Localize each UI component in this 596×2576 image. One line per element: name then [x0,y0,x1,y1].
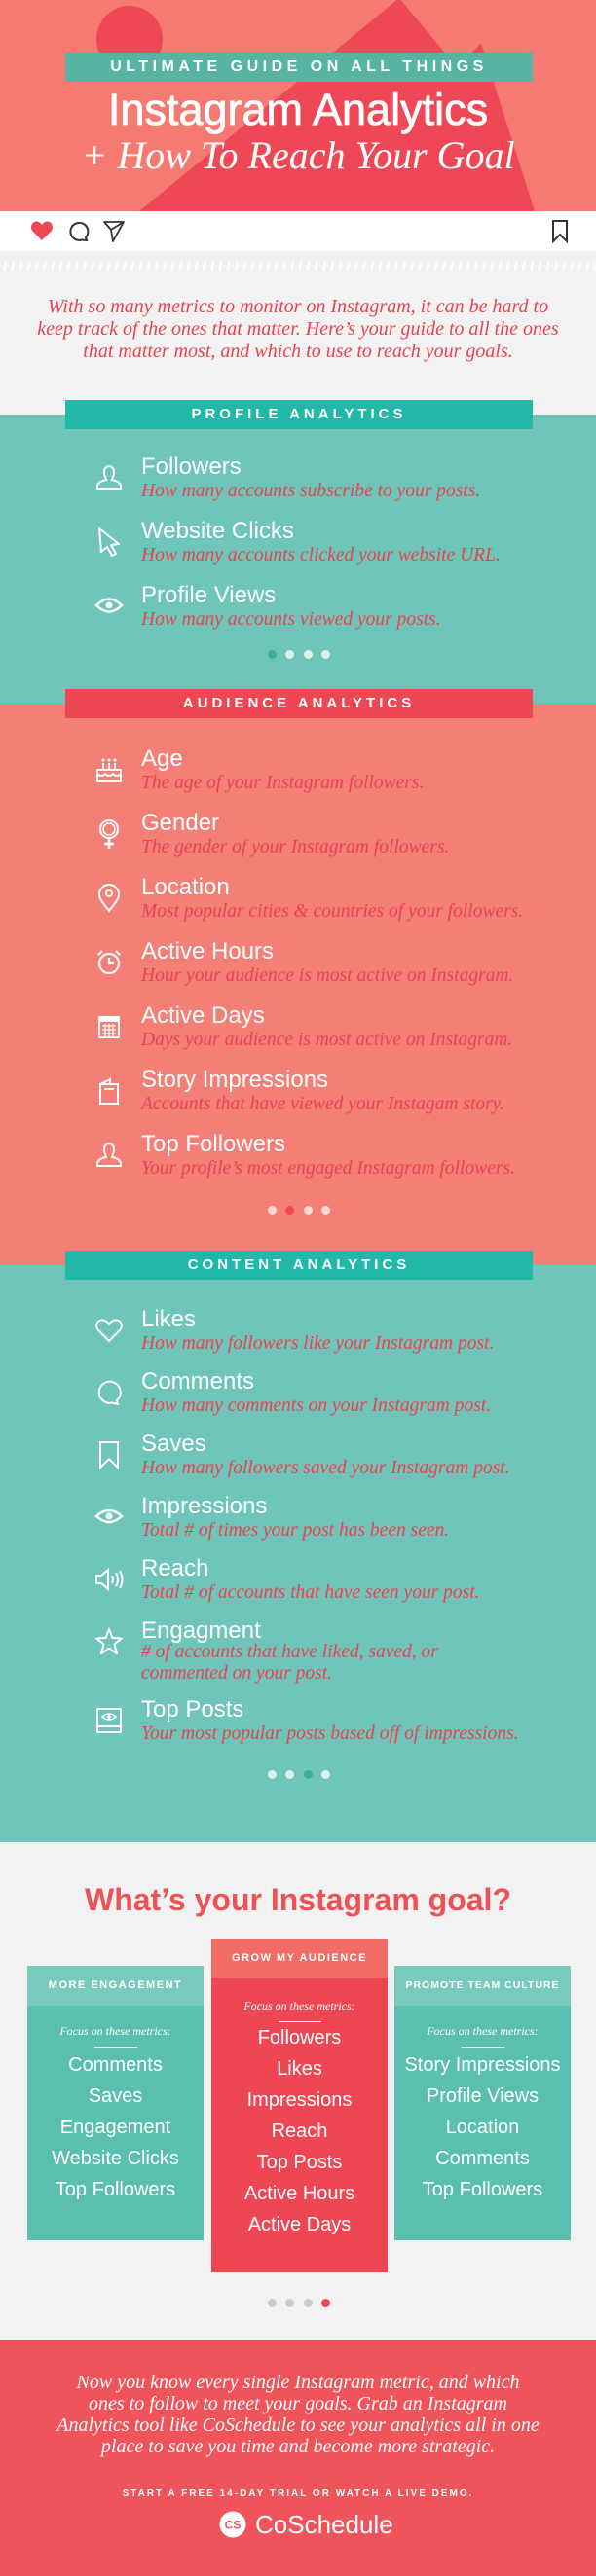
dots: audience [268,1206,330,1215]
item: active hours: Active Hours [141,938,274,964]
card: promote team culture: Focus on these metrics: [427,2024,539,2038]
card: promote team culture: Profile Views [427,2086,539,2107]
item: top followers: Your profile’s most engaged Instagram followers. [141,1158,515,1179]
item: reach: Total # of accounts that have seen your post. [141,1582,480,1603]
heading: content analytics [65,1251,533,1280]
goal heading: What’s your Instagram goal? [85,1882,511,1917]
item: engagement: # of accounts that have liked, saved, or [141,1642,438,1662]
item: gender: Gender [141,810,219,836]
item: engagement [95,1617,438,1684]
item: profile views [94,582,441,630]
item: reach [95,1555,480,1603]
card: promote team culture: Comments [435,2148,530,2169]
card: promote team culture: Location [446,2117,519,2138]
card: more engagement: MORE ENGAGEMENT [49,1979,182,1991]
item: impressions: Total # of times your post has been seen. [141,1520,449,1541]
item: top followers [96,1131,515,1179]
card: more engagement [27,1966,204,2240]
icon: heart [31,222,53,240]
card: grow my audience: Likes [277,2058,322,2080]
icon: comment [69,222,90,241]
card: more engagement: Website Clicks [52,2148,179,2169]
heading: audience analytics [65,689,533,718]
dots: goal [268,2299,330,2307]
title: Instagram Analytics [108,85,488,134]
item: top posts: Your most popular posts based off of impressions. [141,1723,519,1744]
footer text: Analytics tool like CoSchedule to see your analytics all in one [56,2414,540,2436]
item: age [96,745,424,793]
card: grow my audience: Active Hours [244,2183,354,2204]
item: website clicks [98,518,501,565]
item: likes [95,1306,494,1354]
card: promote team culture: Story Impressions [404,2054,561,2076]
card: grow my audience: Reach [272,2121,327,2142]
panel: audience analytics [0,704,596,1265]
item: impressions: Impressions [141,1493,267,1519]
icon: send [103,221,125,242]
item: active days: Days your audience is most active on Instagram. [141,1030,512,1050]
item: story impressions: Story Impressions [141,1067,328,1093]
card: grow my audience: Impressions [247,2089,352,2111]
item: story impressions: Accounts that have viewed your Instagam story. [141,1094,504,1114]
item: active days: Active Days [141,1002,265,1029]
item: followers: How many accounts subscribe to your posts. [141,481,480,501]
item: followers: Followers [141,454,242,480]
heading: audience analytics: AUDIENCE ANALYTICS [183,695,415,711]
item: active hours: Hour your audience is most active on Instagram. [141,965,513,986]
footer text: ones to follow to meet your goals. Grab an Instagram [89,2393,507,2414]
item: website clicks: How many accounts clicked your website URL. [141,545,501,565]
subtitle: + How To Reach Your Goal [81,133,515,177]
card: more engagement: Saves [89,2086,142,2107]
kicker bar: ULTIMATE GUIDE ON ALL THINGS [110,58,488,75]
item: comments [97,1368,491,1416]
heading: content analytics: CONTENT ANALYTICS [188,1256,410,1273]
footer text [56,2372,540,2457]
hash strip [4,261,596,271]
card: promote team culture: Top Followers [423,2179,542,2200]
card: more engagement: Top Followers [56,2179,175,2200]
card: more engagement: Comments [68,2054,163,2076]
header banner [0,0,596,211]
card: promote team culture [394,1966,571,2240]
item: top followers: Top Followers [141,1131,285,1157]
logo: CoSchedule [255,2510,393,2539]
icon: bookmark [552,220,568,243]
dots: profile [268,650,330,659]
item: likes: Likes [141,1306,196,1332]
item: gender: The gender of your Instagram followers. [141,837,449,857]
item: top posts [96,1696,519,1744]
item: comments: How many comments on your Instagram post. [141,1396,491,1416]
item: location: Most popular cities & countries of your followers. [141,901,523,922]
intro text: that matter most, and which to use to reach your goals. [83,341,513,362]
card: grow my audience: Focus on these metrics: [243,1999,355,2013]
card: grow my audience: Active Days [248,2214,351,2235]
card: grow my audience: GROW MY AUDIENCE [232,1952,367,1964]
panel: content analytics [0,1265,596,1842]
item: likes: How many followers like your Instagram post. [141,1333,494,1354]
item: age: The age of your Instagram followers. [141,773,424,793]
call to action: START A FREE 14-DAY TRIAL OR WATCH A LIVE DEMO. [123,2488,473,2499]
dots: content [268,1770,330,1779]
card: more engagement: Engagement [60,2117,170,2138]
card: grow my audience: Followers [258,2027,341,2049]
heading: profile analytics: PROFILE ANALYTICS [191,406,407,422]
intro text: keep track of the ones that matter. Here’s your guide to all the ones [37,318,559,340]
item: profile views: Profile Views [141,582,276,608]
card: grow my audience: Top Posts [257,2152,342,2173]
item: engagement: Engagment [141,1617,261,1644]
item: website clicks: Website Clicks [141,518,294,544]
card: more engagement: Focus on these metrics: [59,2024,171,2038]
item: engagement: commented on your post. [141,1663,332,1684]
intro text [37,296,559,362]
item: active hours [97,938,513,986]
footer text: place to save you time and become more strategic. [101,2436,495,2457]
item: saves [99,1431,510,1478]
card: grow my audience [211,1939,388,2272]
item: story impressions [99,1067,504,1114]
kicker bar [65,53,533,82]
item: saves: Saves [141,1431,206,1457]
item: saves: How many followers saved your Instagram post. [141,1458,510,1478]
item: location [98,874,523,922]
item: active days [98,1002,512,1050]
card: promote team culture: PROMOTE TEAM CULTURE [405,1979,560,1991]
item: age: Age [141,745,183,772]
item: profile views: How many accounts viewed your posts. [141,609,441,630]
item: reach: Reach [141,1555,208,1581]
logo: CS [225,2519,241,2532]
item: location: Location [141,874,230,900]
intro text: With so many metrics to monitor on Instagram, it can be hard to [48,296,548,317]
heading: profile analytics [65,400,533,429]
background shapes [96,0,535,211]
panel: profile analytics [0,415,596,704]
item: gender [99,810,449,857]
item: top posts: Top Posts [141,1696,243,1723]
footer text: Now you know every single Instagram metric, and which [77,2372,519,2393]
item: comments: Comments [141,1368,254,1395]
footer [0,2340,596,2576]
item: followers [96,454,480,501]
item: impressions [94,1493,449,1541]
instagram action bar [0,211,596,251]
